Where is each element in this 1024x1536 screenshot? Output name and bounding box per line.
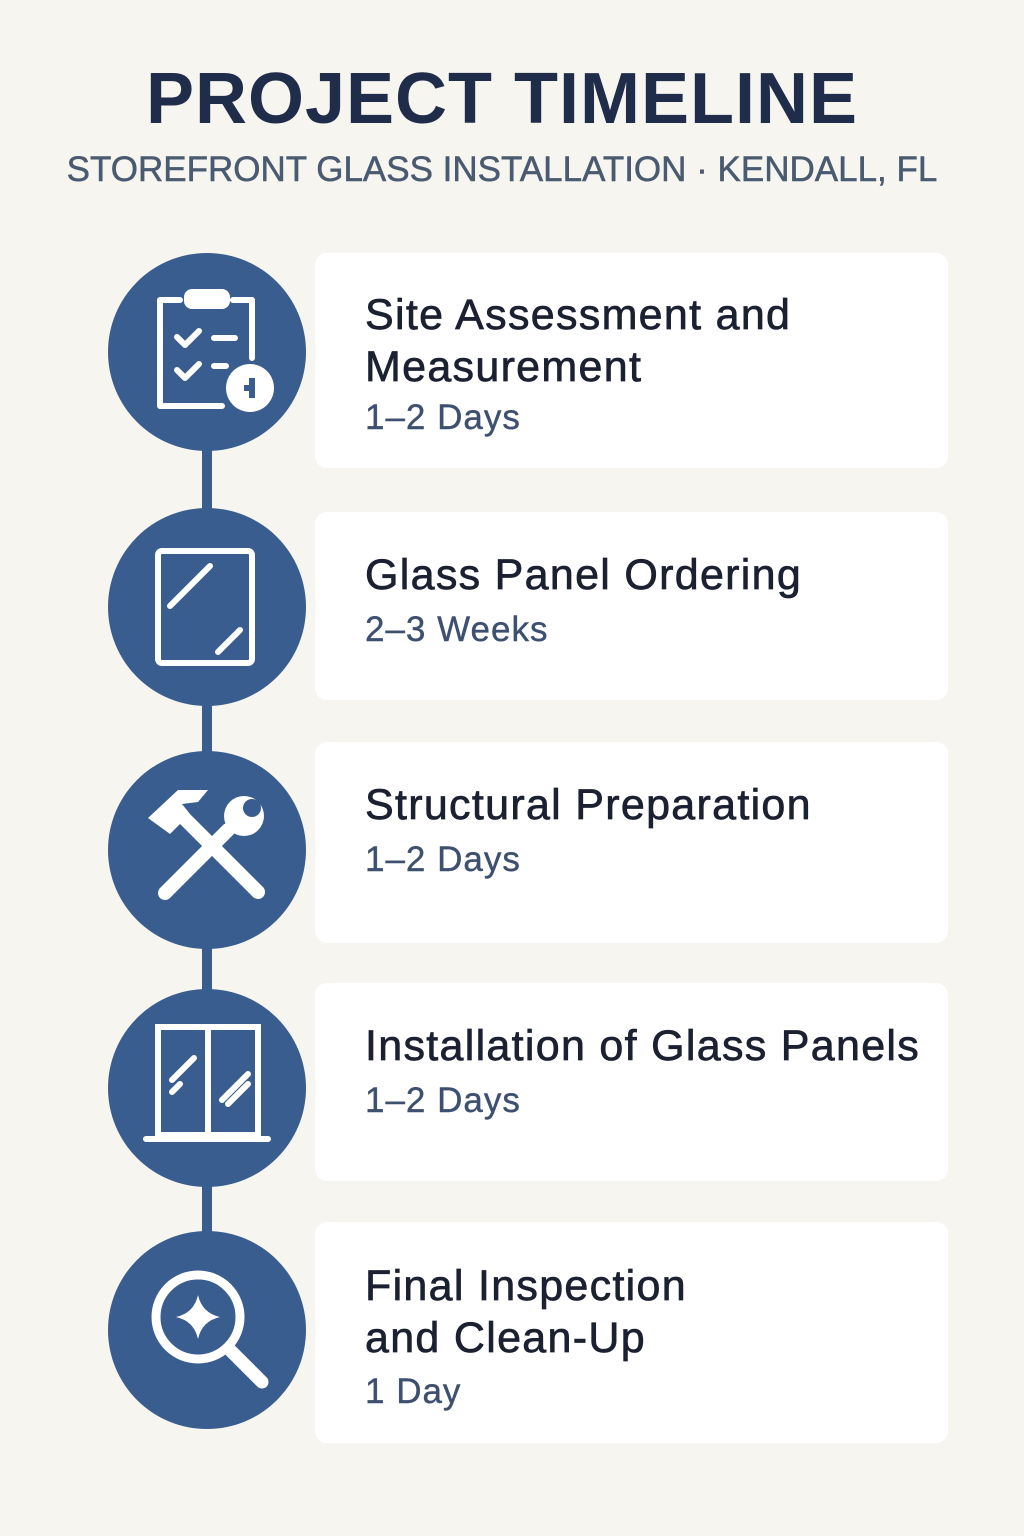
card 3 — [315, 742, 948, 943]
card 3: 1–2 Days — [365, 840, 521, 879]
card 2: Glass Panel Ordering — [365, 551, 802, 599]
icon: clipboard — [108, 253, 306, 451]
icon: hammer and wrench — [108, 751, 306, 949]
card 4 — [315, 983, 948, 1181]
card 5: Final Inspection — [365, 1262, 687, 1310]
title: PROJECT TIMELINE — [146, 59, 858, 139]
timeline with icons — [108, 253, 306, 1429]
card 2 — [315, 512, 948, 700]
card 1: Measurement — [365, 343, 642, 391]
card 1: 1–2 Days — [365, 398, 521, 437]
card 4: 1–2 Days — [365, 1081, 521, 1120]
subtitle: STOREFRONT GLASS INSTALLATION · KENDALL, FL — [67, 150, 937, 189]
card 4: Installation of Glass Panels — [365, 1022, 920, 1070]
card 2: 2–3 Weeks — [365, 610, 548, 649]
icon: glass panel — [108, 508, 306, 706]
icon: magnifier — [108, 1231, 306, 1429]
icon: window — [108, 989, 306, 1187]
card 5 — [315, 1222, 948, 1443]
card 5: and Clean-Up — [365, 1314, 646, 1362]
card 5: 1 Day — [365, 1372, 461, 1411]
card 3: Structural Preparation — [365, 781, 812, 829]
card 1 — [315, 253, 948, 468]
card 1: Site Assessment and — [365, 291, 791, 339]
